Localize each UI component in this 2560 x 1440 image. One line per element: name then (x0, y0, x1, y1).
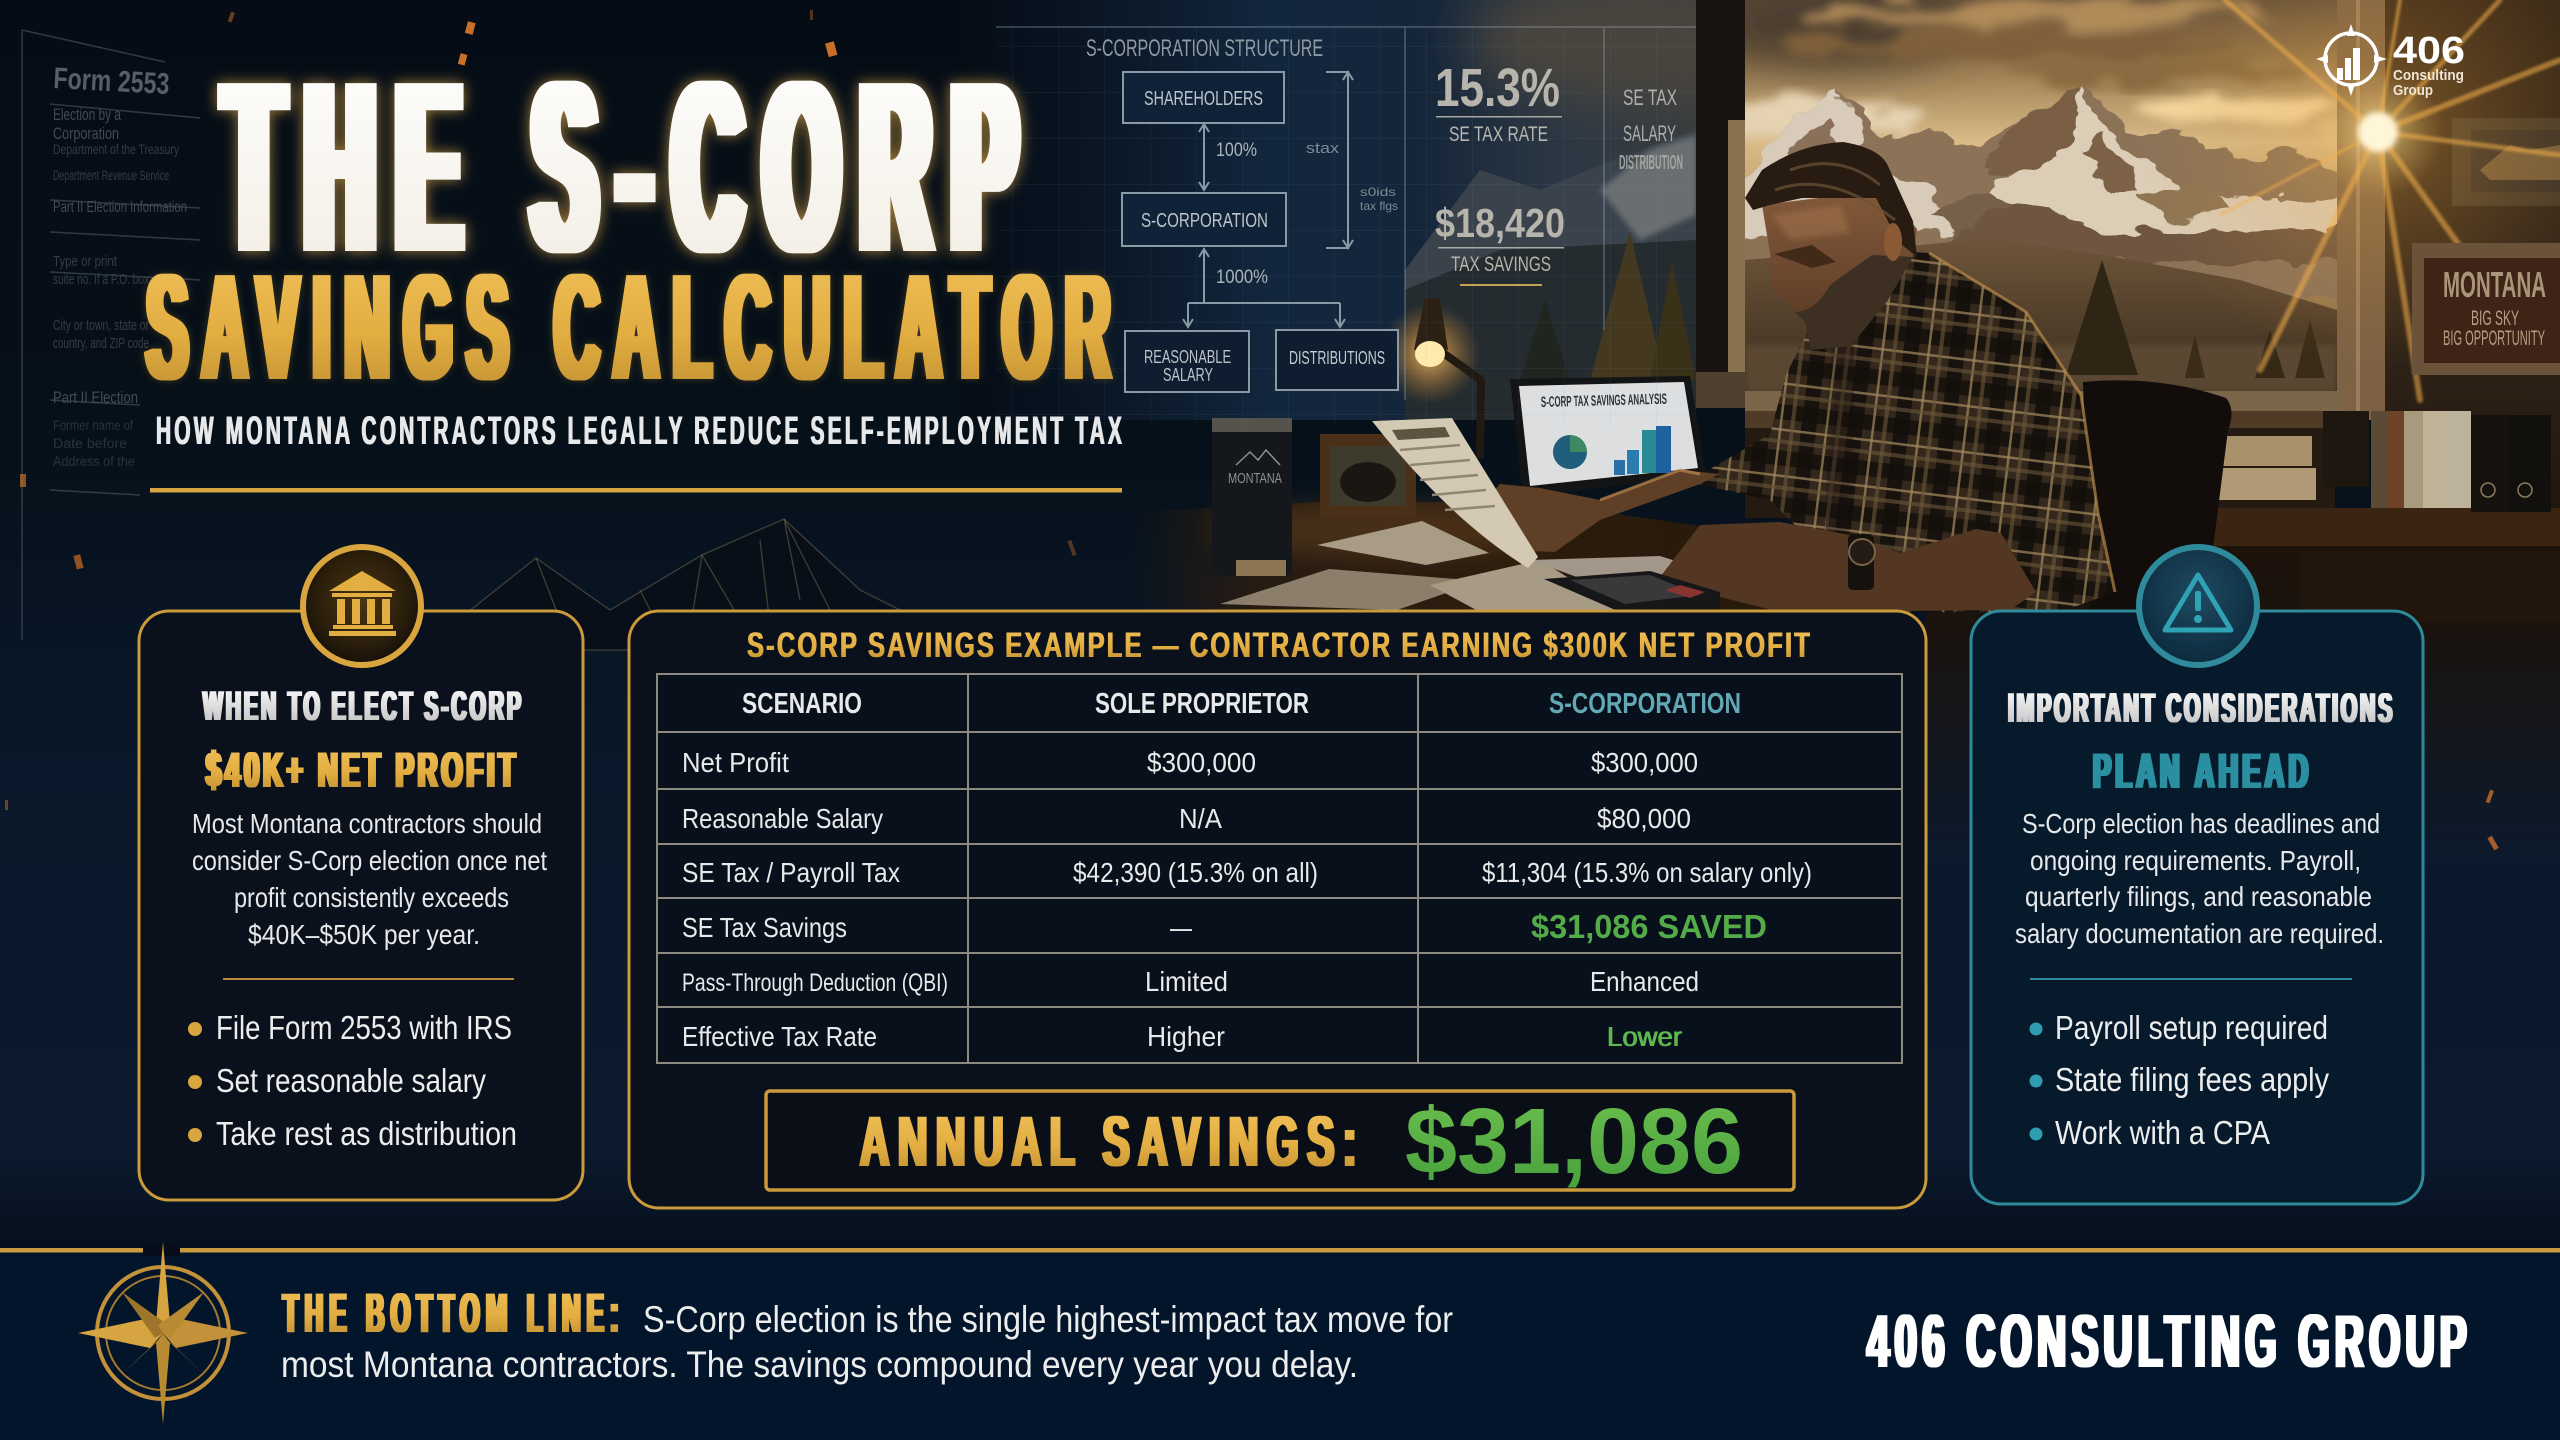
sole proprietor values: Limited (1145, 966, 1228, 997)
scene: window with sunset mountains, man at desk (1030, 0, 2560, 772)
column headers: SCENARIO (742, 688, 862, 720)
heading: WHEN TO ELECT S-CORP (203, 682, 524, 729)
sill (1745, 391, 2345, 411)
s-corporation box (1122, 193, 1286, 246)
bottom band (0, 1251, 2560, 1440)
background: faint Form 2553 document: Department of the Treasury (53, 141, 179, 157)
background: faint Form 2553 document: Address of the (53, 453, 135, 469)
panel: when to elect S-Corp (139, 547, 583, 1200)
background: faint Form 2553 document: Corporation (53, 124, 119, 143)
hologram chart: S-Corporation structure: tax flgs (1360, 199, 1398, 213)
row labels: Pass-Through Deduction (QBI) (682, 969, 948, 997)
background: faint Form 2553 document: City or town, state or (53, 317, 149, 334)
logo: 406 Consulting Group: Group (2393, 83, 2433, 99)
hologram chart: S-Corporation structure: 1000% (1216, 267, 1268, 288)
background: faint Form 2553 document (22, 30, 200, 640)
hologram chart: S-Corporation structure: stax (1306, 140, 1340, 157)
wall art (2452, 118, 2560, 206)
distributions box: DISTRIBUTIONS (1289, 348, 1385, 368)
hologram stat: 15.3% SE tax rate: SE TAX RATE (1449, 123, 1548, 146)
background: faint Form 2553 document: Date before (53, 435, 127, 451)
pine tree (2066, 260, 2138, 375)
background: faint Form 2553 document: Form 2553 (53, 62, 170, 101)
s-corporation values: $11,304 (15.3% on salary only) (1482, 857, 1812, 888)
panel: important considerations (1971, 547, 2423, 1204)
s-corporation values: $300,000 (1591, 747, 1698, 778)
body text: Most Montana contractors should (192, 808, 542, 839)
panel: savings example table (629, 611, 1926, 1208)
text: SAVINGS CALCULATOR (146, 242, 1124, 411)
background: faint Form 2553 document: country, and ZIP code (53, 335, 149, 352)
body text: $40K–$50K per year. (248, 919, 480, 950)
bottom line message: most Montana contractors. The savings compound every year you delay. (281, 1344, 1358, 1385)
hologram labels: side column: SE TAX (1623, 85, 1677, 110)
desk lamp (1380, 298, 1481, 458)
far mountain range (1735, 84, 2350, 300)
near ridge (1745, 238, 2337, 392)
sky and mountain view (1700, 0, 2350, 392)
checklist: File Form 2553 with IRS (216, 1009, 512, 1046)
hologram labels: side column: SALARY (1623, 121, 1676, 146)
sole proprietor values: N/A (1179, 803, 1222, 834)
insulated mug (1212, 418, 1292, 576)
shareholders box (1123, 72, 1284, 123)
body text: quarterly filings, and reasonable (2025, 881, 2372, 912)
row labels: Reasonable Salary (682, 803, 883, 834)
s-corporation values: Enhanced (1590, 966, 1699, 997)
text: DISTRIBUTION (1619, 152, 1683, 174)
s-corporation values (1482, 747, 1812, 1052)
hologram labels: side column (1619, 85, 1683, 174)
laptop (1510, 376, 1706, 498)
column headers: S-CORPORATION (1549, 688, 1741, 720)
icon: bank coin (303, 547, 421, 665)
sole proprietor values: $300,000 (1147, 747, 1256, 778)
background: faint Form 2553 document: Election by a (53, 105, 121, 124)
body text (192, 808, 547, 950)
background: faint Form 2553 document: Former name of (53, 417, 133, 433)
gold band rule (0, 1248, 2560, 1252)
bottom line message: THE BOTTOM LINE: (283, 1281, 625, 1344)
logo: 406 Consulting Group: Consulting (2393, 68, 2464, 84)
body text: profit consistently exceeds (234, 882, 509, 913)
reasonable salary box: REASONABLE (1144, 347, 1231, 367)
checklist: Payroll setup required (2055, 1009, 2328, 1046)
man: right arm, hand and watch (1650, 522, 2036, 612)
background: faint Form 2553 document: Department Revenue Service (53, 167, 169, 183)
s-corporation box: S-CORPORATION (1141, 210, 1268, 232)
background: faint Form 2553 document: suite no. If a P.O. box (53, 271, 149, 288)
body text: consider S-Corp election once net (192, 845, 547, 876)
reasonable salary box: SALARY (1163, 365, 1213, 385)
hologram stat: 15.3% SE tax rate: 15.3% (1435, 58, 1560, 118)
window frame right and wall (2337, 0, 2385, 420)
s-corporation values: $31,086 SAVED (1531, 908, 1767, 945)
icon: compass rose (78, 1242, 248, 1424)
sun and rays (2143, 0, 2560, 400)
insulated mug: MONTANA (1228, 470, 1282, 487)
annual savings callout (766, 1089, 1794, 1193)
background: faint Form 2553 document: Type or print (53, 253, 118, 270)
row labels: Effective Tax Rate (682, 1021, 877, 1052)
subtitle: HOW MONTANA CONTRACTORS LEGALLY REDUCE SELF-EMPLOYMENT TAX (156, 409, 1125, 453)
reasonable salary box (1125, 331, 1249, 392)
s-corporation values: Lower (1607, 1021, 1682, 1052)
body text: S-Corp election has deadlines and (2022, 808, 2380, 839)
text: THE S-CORP (225, 30, 1039, 303)
row labels: Net Profit (682, 747, 789, 778)
window frame left (1696, 0, 1745, 400)
structure arrows (1183, 72, 1353, 327)
man: shirt (1688, 250, 2115, 612)
hologram chart: S-Corporation structure (996, 27, 1696, 427)
back desk with books (1926, 411, 2560, 866)
hologram stat: 15.3% SE tax rate (1435, 58, 1562, 146)
body text (2015, 808, 2384, 949)
sole proprietor values: Higher (1147, 1021, 1225, 1052)
checklist: Work with a CPA (2055, 1114, 2270, 1151)
annual savings callout: $31,086 (1405, 1089, 1743, 1193)
annual savings callout: ANNUAL SAVINGS: (860, 1103, 1365, 1182)
plan ahead: PLAN AHEAD (2093, 743, 2312, 799)
hologram stat: $18,420 tax savings (1435, 200, 1565, 286)
column headers (742, 688, 1741, 720)
distributions box (1276, 330, 1398, 390)
man: head (1745, 142, 1917, 350)
shareholders box: SHAREHOLDERS (1144, 88, 1263, 110)
table grid (657, 674, 1902, 1063)
body text: salary documentation are required. (2015, 918, 2384, 949)
sole proprietor values (1073, 747, 1318, 1052)
background: faint Form 2553 document: Part II Election Information (53, 199, 187, 216)
logo: 406 Consulting Group: 406 (2393, 30, 2465, 72)
hologram stat: $18,420 tax savings: $18,420 (1435, 200, 1565, 246)
row labels: SE Tax / Payroll Tax (682, 857, 900, 888)
sole proprietor values: $42,390 (15.3% on all) (1073, 857, 1318, 888)
man: left arm, hand and paper (1372, 418, 1720, 568)
ember sparks (5, 10, 2499, 850)
logo: 406 Consulting Group (2316, 24, 2465, 99)
threshold: $40K+ NET PROFIT (206, 742, 519, 798)
background: wireframe mountains (420, 519, 980, 650)
calculator (1544, 571, 1720, 612)
hologram chart: S-Corporation structure: S-CORPORATION STRUCTURE (1086, 35, 1323, 62)
bottom line message: S-Corp election is the single highest-impact tax move for (643, 1299, 1453, 1340)
checklist: State filing fees apply (2055, 1061, 2329, 1098)
hologram stat: $18,420 tax savings: TAX SAVINGS (1451, 253, 1551, 276)
checklist (2030, 1009, 2329, 1151)
background: faint Form 2553 document: Part II Election (53, 388, 138, 407)
column headers: SOLE PROPRIETOR (1095, 688, 1309, 720)
wall sign: Montana (2412, 243, 2560, 375)
body text: ongoing requirements. Payroll, (2030, 845, 2361, 876)
bottom line message (281, 1281, 1453, 1385)
row labels (682, 747, 948, 1052)
laptop: S-CORP TAX SAVINGS ANALYSIS (1541, 391, 1667, 411)
checklist (188, 1009, 517, 1152)
gold title rule (150, 488, 1122, 492)
icon: warning coin (2139, 547, 2257, 665)
window glass with hologram backdrop (1030, 0, 1696, 420)
hologram chart: S-Corporation structure: s0ids (1360, 185, 1396, 199)
checklist: Set reasonable salary (216, 1062, 486, 1099)
front desk and papers (1130, 502, 2000, 612)
row labels: SE Tax Savings (682, 912, 847, 943)
table heading: S-CORP SAVINGS EXAMPLE — CONTRACTOR EARNING $300K NET PROFIT (747, 626, 1812, 665)
hologram chart: S-Corporation structure: 100% (1216, 140, 1257, 161)
wall sign: Montana: BIG SKY (2471, 307, 2519, 330)
picture frame (1320, 434, 1416, 517)
s-corporation values: $80,000 (1597, 803, 1691, 834)
office chair (2083, 380, 2232, 612)
checklist: Take rest as distribution (216, 1115, 517, 1152)
sole proprietor values: — (1170, 912, 1192, 943)
